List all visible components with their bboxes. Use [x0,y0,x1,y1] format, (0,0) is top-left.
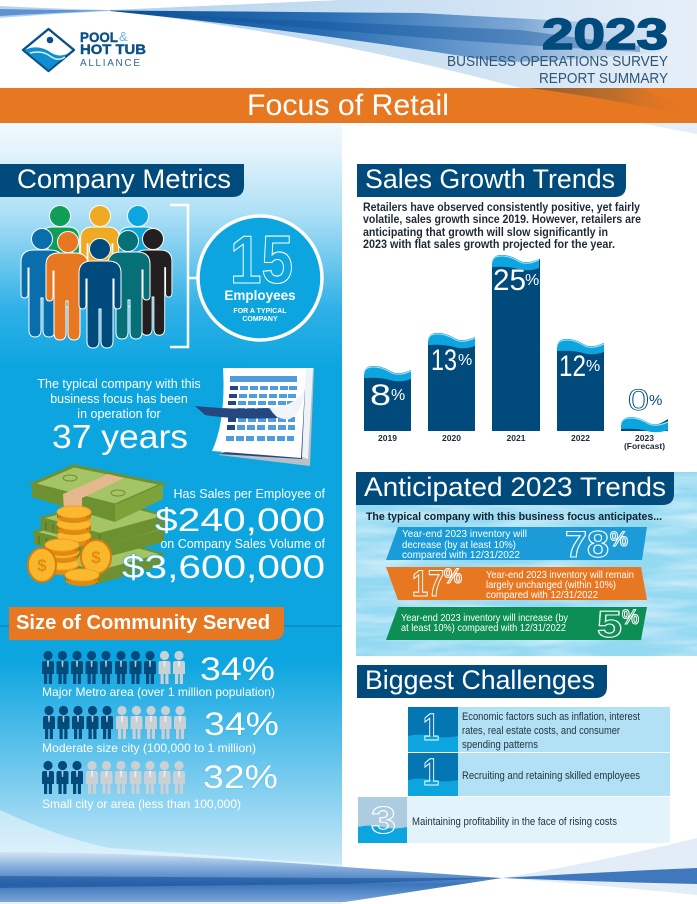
text: sales growth description [363,202,641,251]
bar: 2023 forecast: (Forecast) [624,441,665,451]
stripe: inventory decrease 78%: decrease (by at least 10%) [402,539,516,551]
callout: 15 employees: FOR A TYPICAL [233,308,287,315]
community row: small city: 32% [203,759,278,795]
challenge row: profitability [358,797,670,843]
bar: 2021: % [525,272,539,289]
bar: 2020: 2020 [442,433,461,443]
community row: moderate size city: 34% [204,706,279,742]
bracket [170,205,198,347]
bar: 2019 [364,366,411,443]
bar: 2020: % [458,352,472,369]
bar: 2021 [492,255,540,443]
bar: 2021: 2021 [507,433,526,443]
logo text: ALLIANCE [80,58,140,69]
heading: anticipated 2023 trends: Anticipated 2023 Trends [364,472,666,502]
text: years in operation: 37 years [52,418,188,455]
challenge row: economic factors: spending patterns [462,739,538,751]
panel: anticipated 2023 trends water background [356,472,697,656]
text: years in operation: business focus has been [50,392,188,406]
text: sales figures: $3,600,000 [122,549,325,585]
challenge row: recruiting: Recruiting and retaining skilled employees [462,770,640,782]
stripe: inventory unchanged 17%: Year-end 2023 inventory will remain [486,569,634,581]
challenge row: economic factors: Economic factors such as inflation, interest [462,711,640,723]
stripe: inventory decrease 78%: Year-end 2023 inventory will [402,528,527,540]
community row: small city: Small city or area (less than 100,000) [42,797,241,811]
report title: REPORT SUMMARY [539,70,668,87]
report title: BUSINESS OPERATIONS SURVEY [447,53,668,70]
stripe: inventory increase 5%: Year-end 2023 inventory will increase (by [401,612,569,624]
stripe: inventory decrease 78% [386,524,647,565]
callout: 15 employees: COMPANY [242,316,278,323]
community row: moderate size city [42,706,279,755]
icon: money and coins: $ [37,556,47,575]
text: years in operation [37,377,201,455]
stripe: inventory increase 5% [386,604,647,645]
bar: 2023 forecast [621,384,668,451]
challenge row: recruiting [408,752,670,796]
text: years in operation: in operation for [77,407,161,421]
bar: 2019: 2019 [378,433,397,443]
heading: biggest challenges: Biggest Challenges [365,665,595,695]
stripe: inventory decrease 78%: % [610,528,628,551]
stripe: inventory increase 5%: % [622,606,639,629]
community row: small city [42,759,278,811]
icon: calendar [195,368,314,466]
text: sales growth description: anticipating that growth will slow significantly in [363,227,608,239]
stripe: inventory increase 5%: at least 10%) compared with 12/31/2022 [401,622,566,634]
orange title band: Focus of Retail [247,89,449,122]
callout: 15 employees [198,216,322,340]
challenge row: economic factors: 1 [423,707,439,749]
orange title band [0,88,697,123]
stripe: inventory increase 5%: 5 [597,604,622,645]
stripe: inventory decrease 78%: compared with 12/31/2022 [402,549,520,561]
challenge row: profitability: 3 [371,800,396,842]
report title: 2023 [542,10,668,59]
challenge row: profitability: Maintaining profitability in the face of rising costs [412,816,617,828]
text: years in operation: The typical company with this [37,377,201,391]
logo text: & [119,29,128,44]
stripe: inventory unchanged 17%: 17 [412,563,444,604]
callout: 15 employees: Employees [224,288,296,303]
icon: group of employees [21,206,172,348]
heading: size of community served: Size of Community Served [16,611,270,634]
header background swoosh [0,0,697,130]
bar: 2022 [557,339,604,443]
community row: major metro: Major Metro area (over 1 million population) [42,685,275,699]
text: trends intro: The typical company with this business focus anticipates... [366,511,662,523]
bar: 2019: % [391,387,405,404]
stripe: inventory unchanged 17% [386,563,647,604]
community row: major metro [42,651,275,699]
footer swoosh [0,810,697,904]
heading: company metrics: Company Metrics [17,164,231,194]
text: sales figures: Has Sales per Employee of [174,487,326,501]
callout: 15 employees: 15 [230,222,293,298]
stripe: inventory unchanged 17%: compared with 12/31/2022 [486,589,598,601]
bar: 2022: 2022 [571,433,590,443]
bar: 2020 [428,333,475,443]
bar: 2020: 13 [431,344,457,377]
text: sales figures: $240,000 [155,502,325,538]
bar: 2023 forecast: 2023 [635,433,654,443]
heading: sales growth trends: Sales Growth Trends [365,164,615,194]
text: sales growth description: Retailers have observed consistently positive, yet fairly [363,202,641,214]
bar: 2022: % [586,358,600,375]
stripe: inventory unchanged 17%: % [444,565,462,588]
bar: 2023 forecast: 0 [628,384,649,417]
stripe: inventory unchanged 17%: largely unchanged (within 10%) [486,579,616,591]
text: sales growth description: 2023 with flat sales growth projected for the year. [363,239,615,251]
text: sales figures [122,487,326,585]
panel: left blue column [0,123,342,904]
challenge row: economic factors [408,707,670,752]
bar: 2021: 25 [493,264,526,297]
text: sales figures: on Company Sales Volume of [160,537,326,551]
community row: major metro: 34% [200,651,275,687]
logo text: HOT TUB [80,41,146,57]
bar: 2022: 12 [559,350,586,383]
community row: moderate size city: Moderate size city (100,000 to 1 million) [42,741,256,755]
text: sales growth description: volatile, sales growth since 2019. However, retailers are [363,214,641,226]
logo text: POOL [80,29,118,45]
heading: size of community served [0,607,342,640]
logo text [80,29,146,69]
bar chart: sales growth [364,255,668,451]
challenge row: economic factors: rates, real estate costs, and consumer [462,725,620,737]
icon: diamond water logo [23,29,74,71]
bar: 2019: 8 [370,379,391,412]
stripe: inventory decrease 78%: 78 [565,524,609,565]
logo [23,29,146,71]
report title [447,10,668,87]
challenge row: recruiting: 1 [423,752,439,794]
icon: money and coins: $ [91,548,101,567]
bar: 2023 forecast: % [649,392,662,409]
icon: money and coins [28,466,166,586]
